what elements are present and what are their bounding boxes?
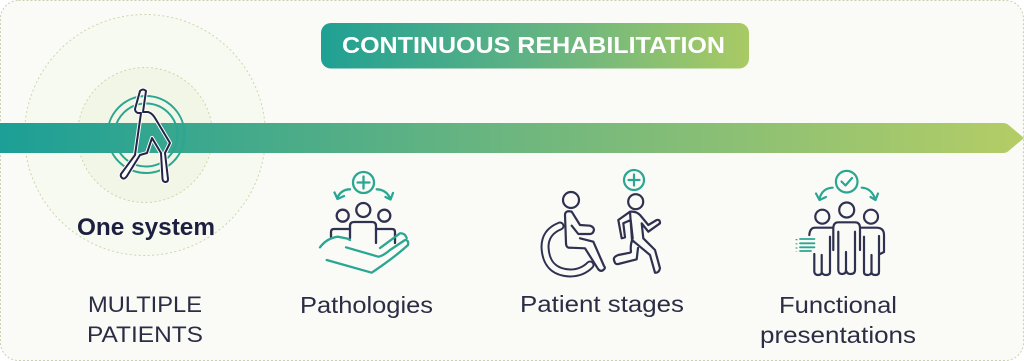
label: functional presentations: Functional [779, 292, 897, 318]
plus badge [624, 170, 644, 190]
label: multiple patients: MULTIPLE [88, 292, 202, 317]
icon: pathologies [320, 172, 408, 273]
icon: functional presentations [796, 171, 884, 275]
hand [320, 233, 408, 273]
arrow band [0, 123, 1024, 153]
outer circle [24, 14, 266, 256]
label: pathologies: Pathologies [300, 292, 433, 318]
icon: one system figure [108, 90, 184, 182]
check badge and arrows [816, 171, 878, 200]
label: functional presentations [760, 292, 916, 348]
title banner [321, 23, 749, 68]
wheelchair user [545, 192, 605, 273]
runner [614, 194, 660, 273]
list lines [796, 239, 814, 252]
label: patient stages: Patient stages [520, 291, 684, 317]
heading: one system: One system [77, 214, 215, 241]
label: multiple patients: PATIENTS [87, 322, 203, 347]
plus badge and arrows [334, 172, 393, 200]
three people [331, 203, 395, 243]
icon: patient stages [545, 170, 660, 273]
title banner: CONTINUOUS REHABILITATION [342, 32, 725, 58]
three people [809, 202, 884, 275]
inner circle [78, 68, 212, 202]
label: multiple patients [87, 292, 203, 347]
label: functional presentations: presentations [760, 322, 916, 348]
